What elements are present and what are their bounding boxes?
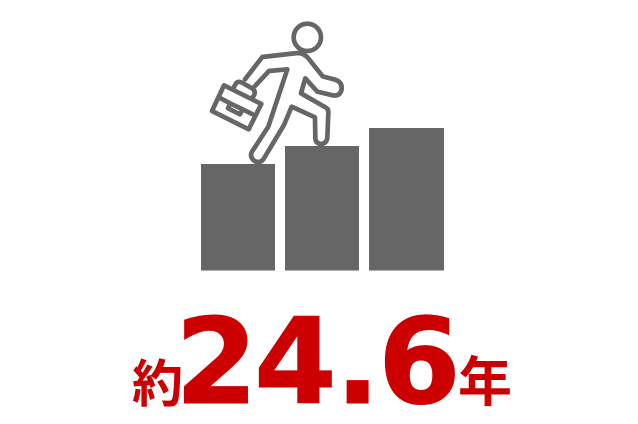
icon: businessman climbing steps with briefcase [212, 24, 342, 162]
bar: medium [285, 146, 359, 270]
prefix: 約 [132, 356, 183, 413]
bar: short [201, 164, 275, 270]
briefcase [212, 85, 261, 129]
bar chart: three rising bars [201, 128, 444, 270]
briefcase handle [233, 82, 255, 99]
body outline [245, 53, 342, 162]
stat: about 24.6 years [132, 294, 512, 424]
briefcase clasp [220, 98, 252, 114]
bar: tall [369, 128, 444, 270]
head [294, 24, 321, 51]
suffix: 年 [458, 353, 512, 413]
